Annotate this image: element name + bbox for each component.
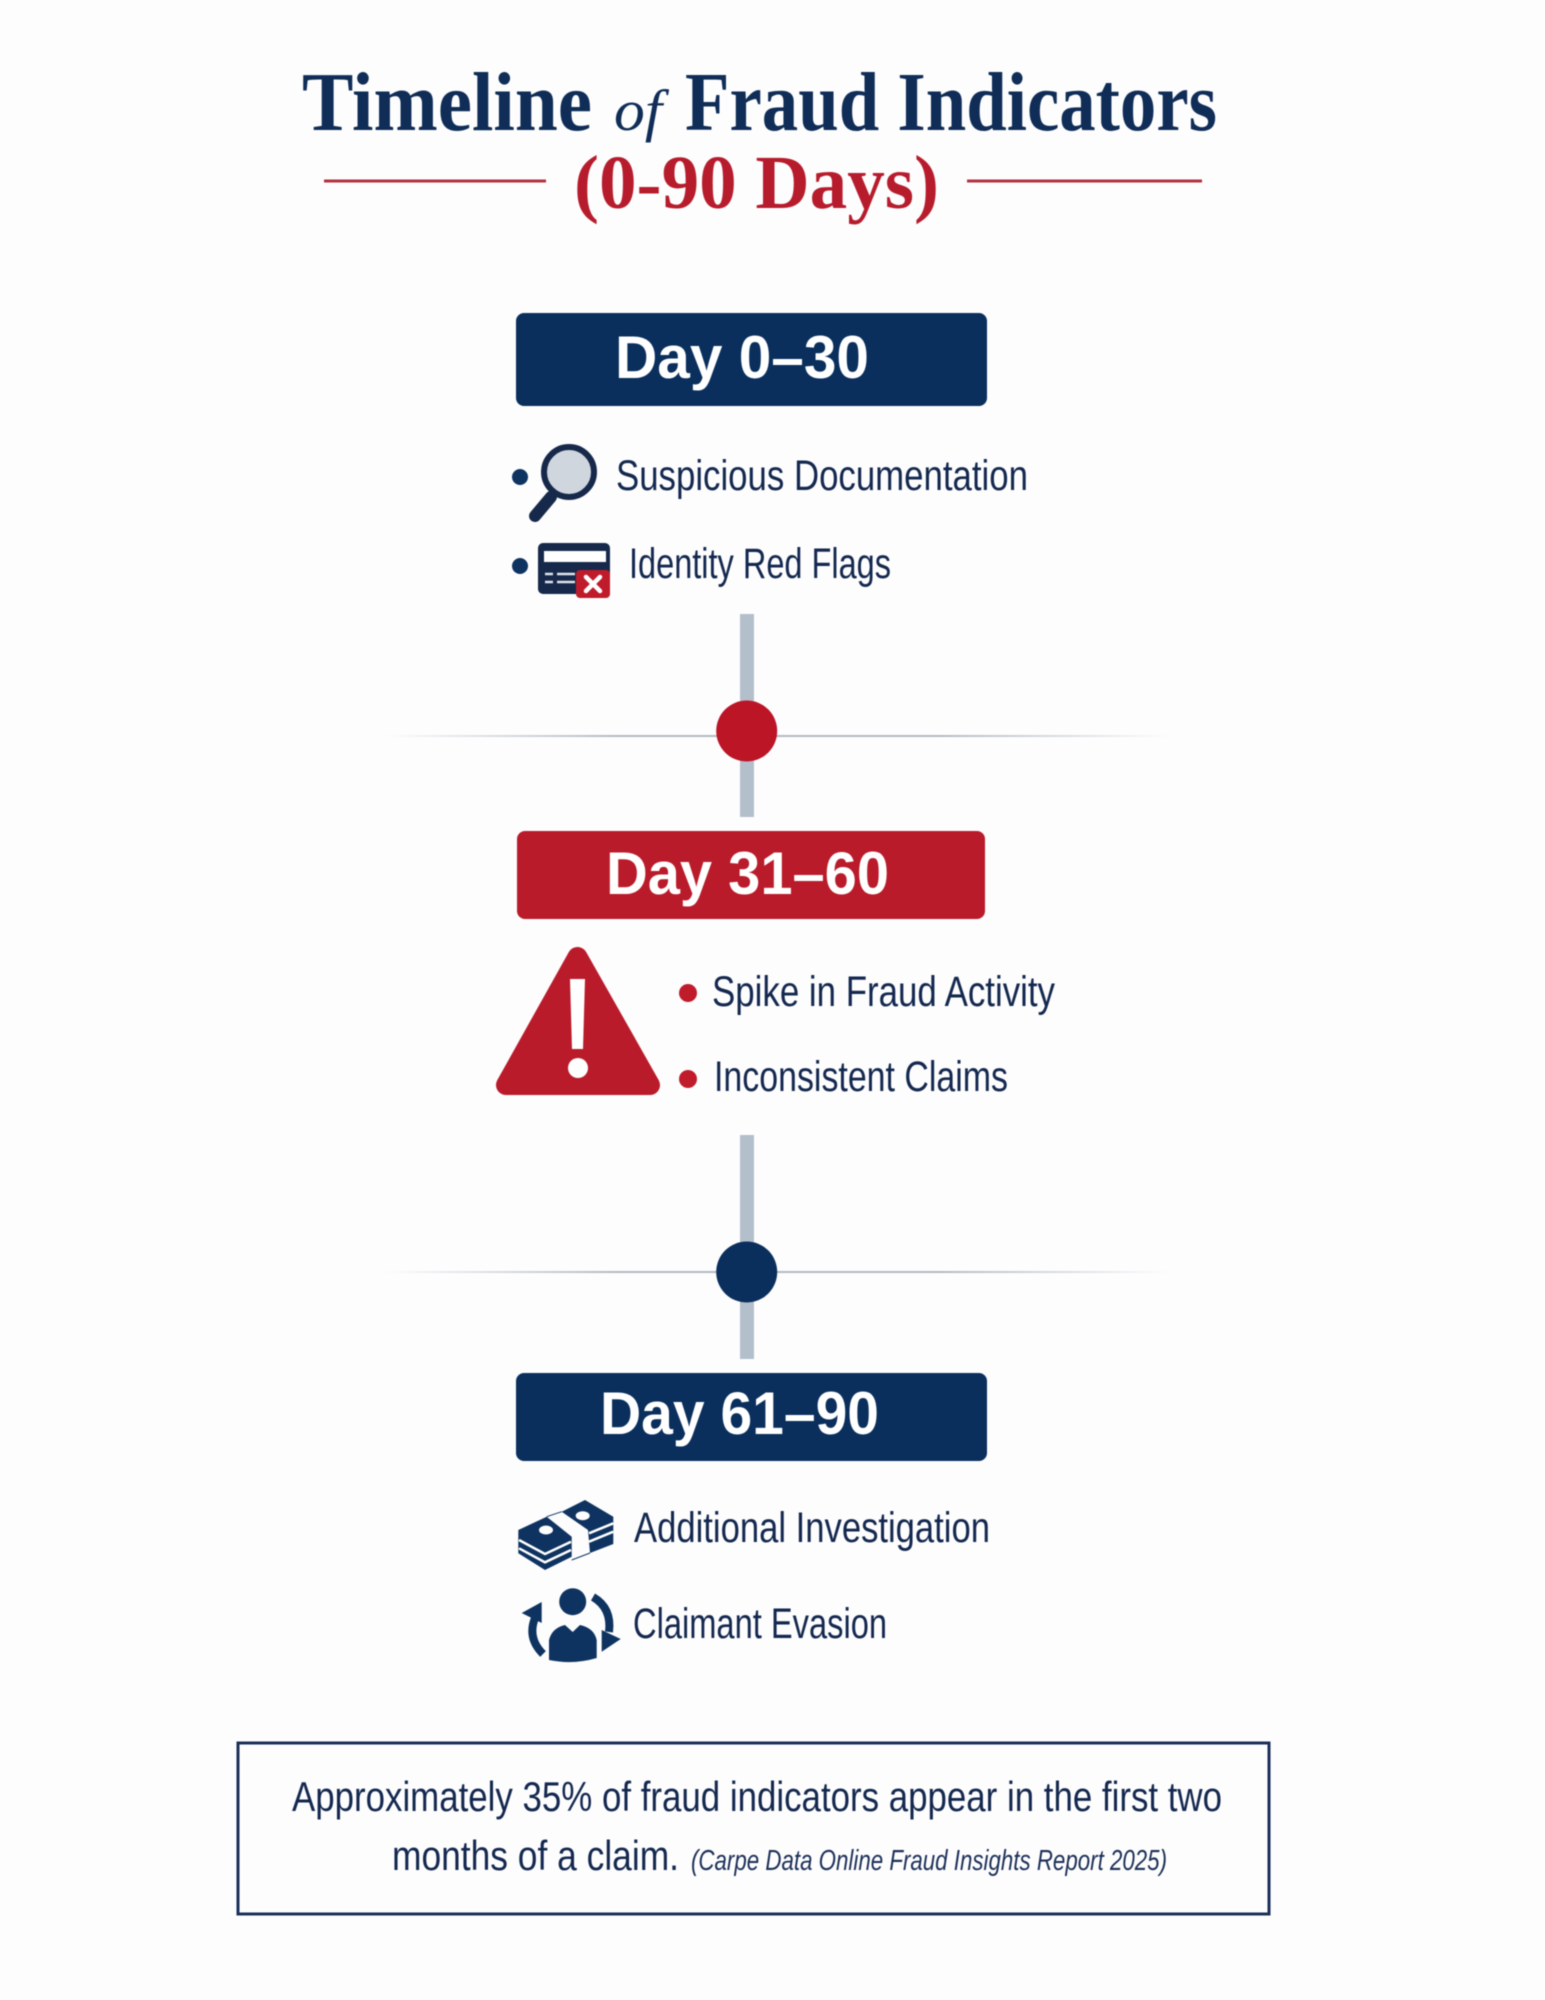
title (302, 56, 1217, 149)
item: Identity Red Flags (512, 540, 891, 598)
badge: Day 31-60 (517, 831, 985, 919)
title: Timeline (302, 56, 592, 149)
badge: Day 61-90: Day 61–90 (600, 1380, 879, 1447)
callout: 35% statistic: (Carpe Data Online Fraud Insights Report 2025) (691, 1845, 1167, 1877)
badge: Day 0-30 (516, 313, 987, 406)
icon: person with circular arrows (522, 1588, 621, 1662)
item: Spike in Fraud Activity: Spike in Fraud Activity (712, 968, 1055, 1016)
item: Claimant Evasion (522, 1588, 887, 1662)
callout: 35% statistic: Approximately 35% of fraud indicators appear in the first two (292, 1773, 1222, 1820)
badge: Day 31-60: Day 31–60 (606, 840, 889, 907)
title: Fraud Indicators (685, 56, 1217, 149)
item: Suspicious Documentation: Suspicious Documentation (616, 452, 1028, 500)
icon: warning triangle (506, 957, 650, 1085)
subtitle with rules (324, 141, 1202, 225)
item: Additional Investigation (518, 1500, 990, 1570)
timeline connector with red node (384, 614, 1170, 817)
icon: stack of cash (518, 1500, 613, 1570)
item: Additional Investigation: Additional Investigation (634, 1504, 990, 1552)
icon: magnifying glass (535, 447, 594, 516)
callout: 35% statistic (238, 1743, 1269, 1914)
item: Inconsistent Claims: Inconsistent Claims (714, 1053, 1008, 1101)
badge: Day 0-30: Day 0–30 (615, 324, 869, 391)
icon: flagged ID card (538, 543, 610, 598)
callout: 35% statistic: months of a claim. (392, 1832, 679, 1879)
subtitle with rules: (0-90 Days) (574, 141, 939, 225)
item: Identity Red Flags: Identity Red Flags (629, 540, 891, 588)
badge: Day 61-90 (516, 1373, 987, 1461)
timeline connector with navy node (384, 1135, 1170, 1359)
title: of (614, 78, 669, 143)
item: Suspicious Documentation (512, 447, 1028, 516)
item: Claimant Evasion: Claimant Evasion (633, 1600, 887, 1648)
